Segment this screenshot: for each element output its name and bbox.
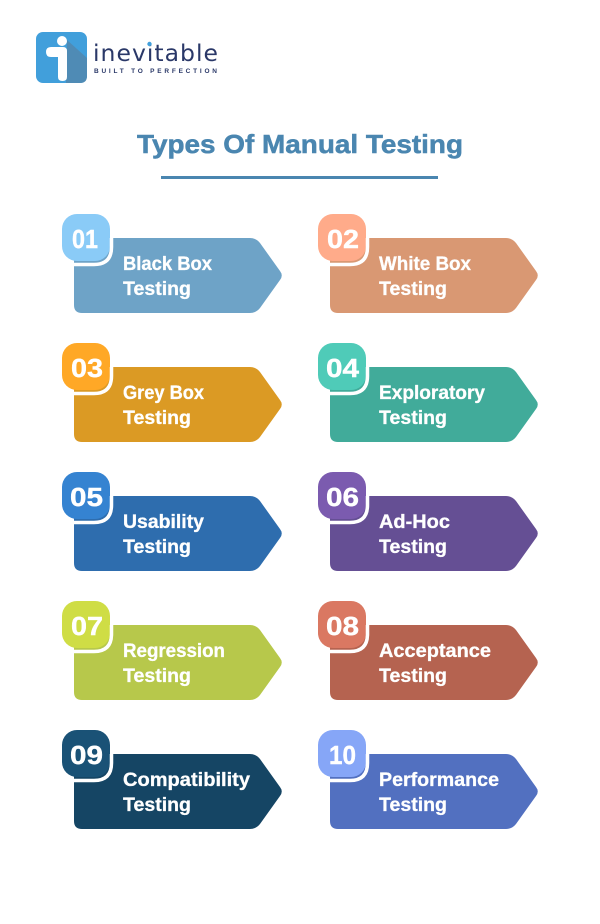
card 04: Exploratory Testing: Exploratory (379, 383, 485, 404)
card 08: Acceptance Testing (318, 601, 538, 700)
card 07: Regression Testing: 07 (71, 613, 103, 641)
logo tagline: BUILT TO PERFECTION (94, 68, 217, 75)
card 06: Ad-Hoc Testing: Ad-Hoc (379, 512, 450, 533)
card 03: Grey Box Testing (62, 343, 282, 442)
card 03: Grey Box Testing: Testing (123, 408, 191, 429)
card 04: Exploratory Testing: Testing (379, 408, 447, 429)
card 04: Exploratory Testing: 04 (326, 355, 360, 383)
card 08: Acceptance Testing: Acceptance (379, 641, 491, 662)
card 07: Regression Testing: Testing (123, 666, 191, 687)
card 06: Ad-Hoc Testing (318, 472, 538, 571)
card 01: Black Box Testing: Black Box (123, 254, 212, 275)
icon: logo mark (36, 32, 87, 83)
card 05: Usability Testing: Testing (123, 537, 191, 558)
card 04: Exploratory Testing (318, 343, 538, 442)
card 05: Usability Testing: 05 (70, 484, 103, 512)
card 03: Grey Box Testing: Grey Box (123, 383, 204, 404)
card 08: Acceptance Testing: 08 (326, 613, 359, 641)
card 01: Black Box Testing (62, 214, 282, 313)
card 02: White Box Testing (318, 214, 538, 313)
card 07: Regression Testing (62, 601, 282, 700)
card 10: Performance Testing: Testing (379, 795, 447, 816)
card 09: Compatibility Testing: Compatibility (123, 770, 250, 791)
card 07: Regression Testing: Regression (123, 641, 225, 662)
card 02: White Box Testing: 02 (327, 226, 359, 254)
card 05: Usability Testing (62, 472, 282, 571)
card 09: Compatibility Testing: Testing (123, 795, 191, 816)
card 01: Black Box Testing: Testing (123, 279, 191, 300)
card 08: Acceptance Testing: Testing (379, 666, 447, 687)
card 06: Ad-Hoc Testing: Testing (379, 537, 447, 558)
card 10: Performance Testing: Performance (379, 770, 499, 791)
card 06: Ad-Hoc Testing: 06 (326, 484, 359, 512)
logo (36, 32, 218, 83)
card 02: White Box Testing: White Box (379, 254, 471, 275)
card 09: Compatibility Testing: 09 (70, 742, 103, 770)
logo wordmark: inevitable (93, 39, 218, 67)
card 02: White Box Testing: Testing (379, 279, 447, 300)
card 10: Performance Testing: 10 (329, 742, 356, 770)
card 03: Grey Box Testing: 03 (71, 355, 103, 383)
card 05: Usability Testing: Usability (123, 512, 204, 533)
card 10: Performance Testing (318, 730, 538, 829)
card 01: Black Box Testing: 01 (72, 226, 98, 254)
title: Types Of Manual Testing (137, 129, 463, 159)
card 09: Compatibility Testing (62, 730, 282, 829)
